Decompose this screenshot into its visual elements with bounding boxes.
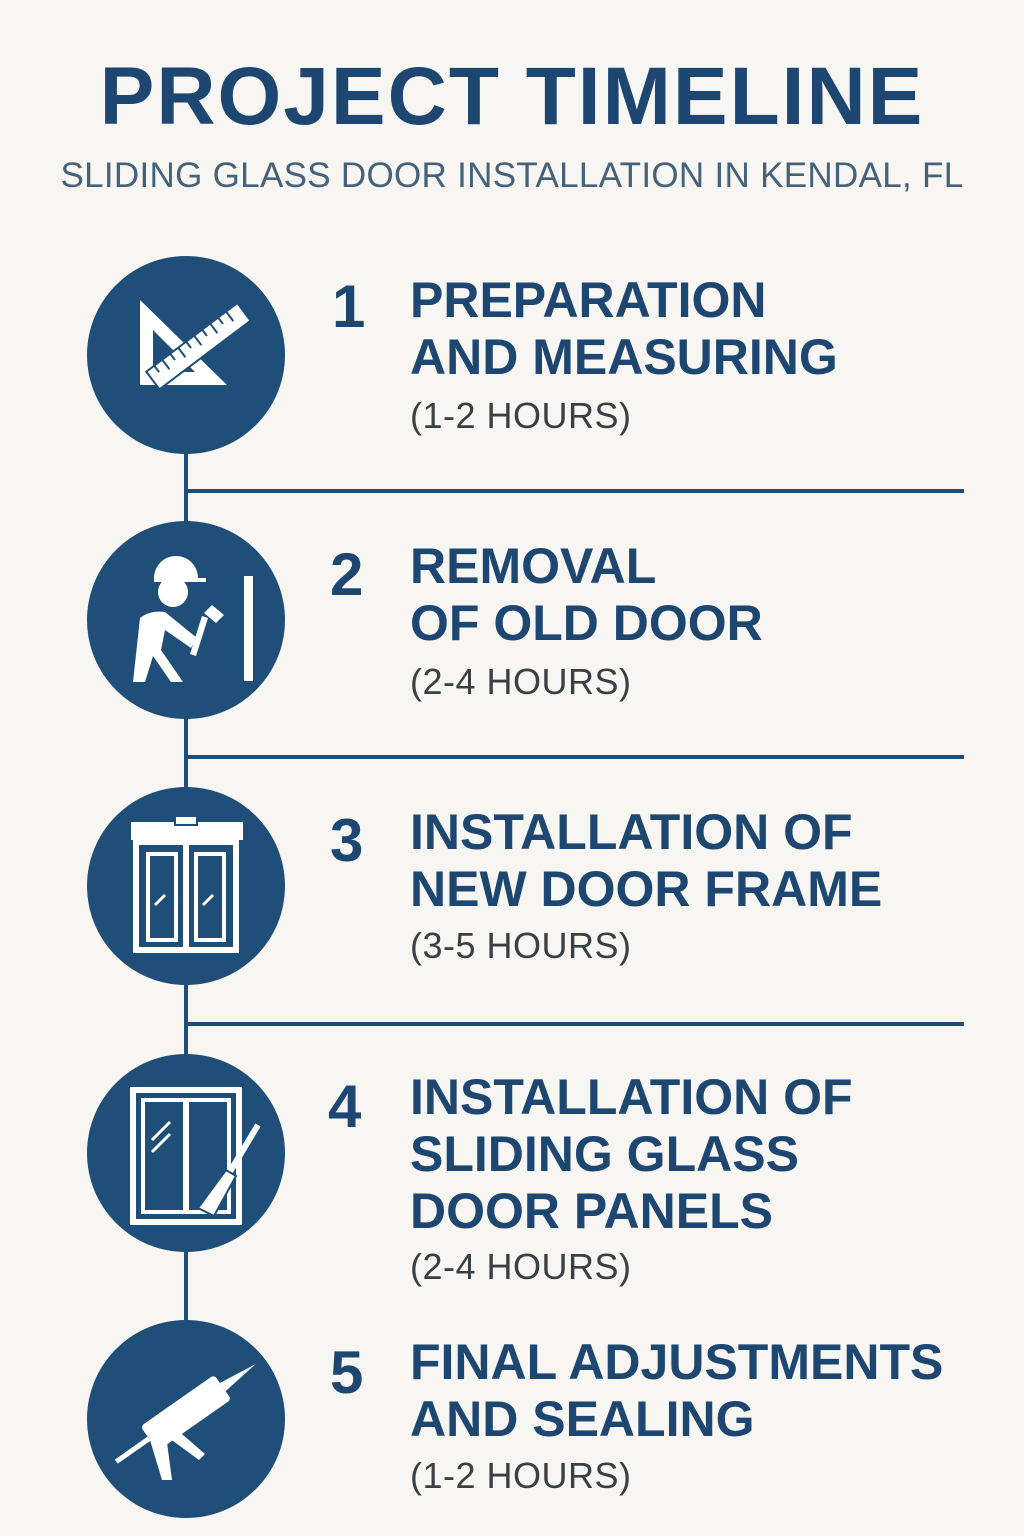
- text: OF OLD DOOR: [410, 595, 763, 651]
- title: PROJECT TIMELINE: [100, 51, 924, 142]
- icon: door frame: [87, 787, 285, 985]
- text: FINAL ADJUSTMENTS: [410, 1334, 943, 1390]
- text: REMOVAL: [410, 538, 656, 594]
- icon: caulk gun: [87, 1320, 285, 1518]
- step 4: [328, 1069, 853, 1287]
- icon: sliding door with screwdriver: [87, 1054, 285, 1252]
- icon: triangle and ruler: [87, 256, 285, 454]
- text: INSTALLATION OF: [410, 804, 853, 860]
- text: (3-5 HOURS): [410, 925, 632, 966]
- text: PREPARATION: [410, 272, 766, 328]
- step 1: [332, 272, 838, 436]
- step 3: [330, 804, 882, 966]
- text: AND MEASURING: [410, 329, 838, 385]
- text: SLIDING GLASS: [410, 1126, 799, 1182]
- text: DOOR PANELS: [410, 1183, 773, 1239]
- text: INSTALLATION OF: [410, 1069, 853, 1125]
- text: 2: [330, 541, 363, 608]
- text: 3: [330, 807, 363, 874]
- step 2: [330, 538, 763, 702]
- text: AND SEALING: [410, 1391, 754, 1447]
- text: (2-4 HOURS): [410, 661, 632, 702]
- subtitle: SLIDING GLASS DOOR INSTALLATION IN KENDAL, FL: [60, 156, 963, 195]
- text: 5: [330, 1339, 363, 1406]
- text: 1: [332, 273, 365, 340]
- icon: worker with hammer: [87, 521, 285, 719]
- text: 4: [328, 1073, 361, 1140]
- text: (2-4 HOURS): [410, 1246, 632, 1287]
- text: (1-2 HOURS): [410, 1455, 632, 1496]
- step 5: [330, 1334, 943, 1496]
- text: (1-2 HOURS): [410, 395, 632, 436]
- text: NEW DOOR FRAME: [410, 861, 882, 917]
